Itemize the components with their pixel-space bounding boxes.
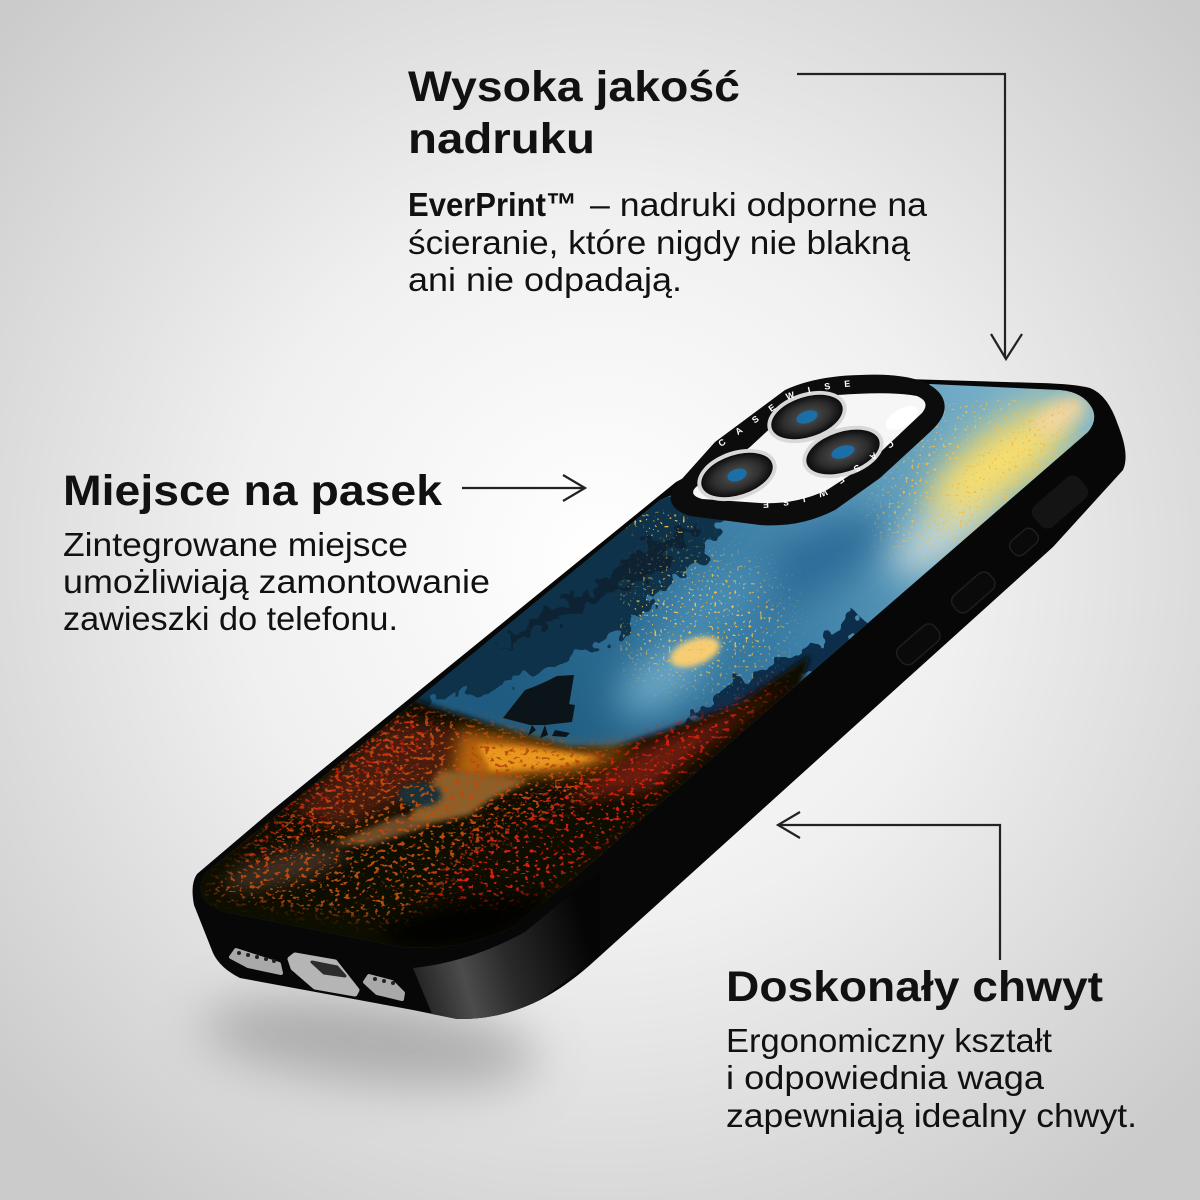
arrow: strap slot — [462, 475, 585, 501]
gold specks — [620, 400, 1100, 720]
body text: ani nie odpadają. — [408, 261, 682, 298]
heading: Doskonały chwyt — [726, 963, 1103, 1011]
body text: Ergonomiczny kształt — [726, 1022, 1052, 1059]
camera ring — [670, 375, 945, 525]
dark trees right — [675, 608, 868, 730]
camera plate — [693, 393, 926, 503]
ring lettering bottom: CASEWISE — [763, 442, 894, 508]
body text: EverPrint™ — [408, 186, 577, 223]
charging port opening — [312, 962, 345, 976]
body text: i odpowiednia waga — [726, 1059, 1045, 1096]
speaker holes right — [373, 977, 395, 985]
body text: Zintegrowane miejsce — [63, 526, 408, 563]
speaker holes left — [237, 951, 276, 963]
body text: zawieszki do telefonu. — [63, 600, 398, 637]
bottom speaker left — [231, 950, 281, 973]
phone case — [192, 374, 1126, 1019]
dark bottom — [380, 895, 555, 948]
heading: Wysoka jakość — [408, 63, 740, 111]
orange speckle foliage — [202, 700, 618, 933]
case body — [193, 378, 1126, 1019]
body text: umożliwiają zamontowanie — [63, 563, 490, 600]
phone shadow — [197, 982, 543, 1102]
orange ridge — [450, 730, 640, 784]
red speckle foliage — [231, 666, 800, 918]
printed artwork — [200, 384, 1094, 948]
lens right — [796, 416, 890, 488]
flash — [882, 401, 922, 435]
dark blue pool — [398, 783, 442, 807]
bottom corner highlight — [413, 870, 600, 1019]
heading: Miejsce na pasek — [63, 467, 442, 515]
clouds — [762, 501, 894, 614]
arrow: grip — [778, 812, 1000, 960]
callout: print quality — [408, 63, 928, 298]
orange wash upper left — [290, 720, 470, 830]
sunlight glow — [912, 387, 1088, 537]
body text: zapewniają idealny chwyt. — [726, 1097, 1137, 1134]
heading: nadruku — [408, 115, 595, 163]
glow behind trees — [666, 631, 724, 673]
arrow: print quality — [797, 74, 1022, 359]
dark treetops left — [414, 496, 724, 707]
camera bump — [670, 374, 945, 526]
ground — [200, 654, 812, 948]
ring lettering top: CASEWISE — [718, 380, 850, 446]
callout: grip — [726, 963, 1137, 1134]
tan dirt path — [400, 770, 530, 830]
callout: strap slot — [63, 467, 490, 637]
lens left — [691, 440, 783, 510]
body text: – nadruki odporne na — [590, 186, 928, 223]
charging port — [290, 955, 357, 994]
lens top — [761, 382, 853, 452]
side buttons — [893, 472, 1092, 668]
dark red wash — [560, 680, 790, 800]
body text: ścieranie, które nigdy nie blakną — [408, 224, 911, 261]
bottom speaker right — [365, 976, 403, 999]
bear and piano — [503, 675, 575, 738]
